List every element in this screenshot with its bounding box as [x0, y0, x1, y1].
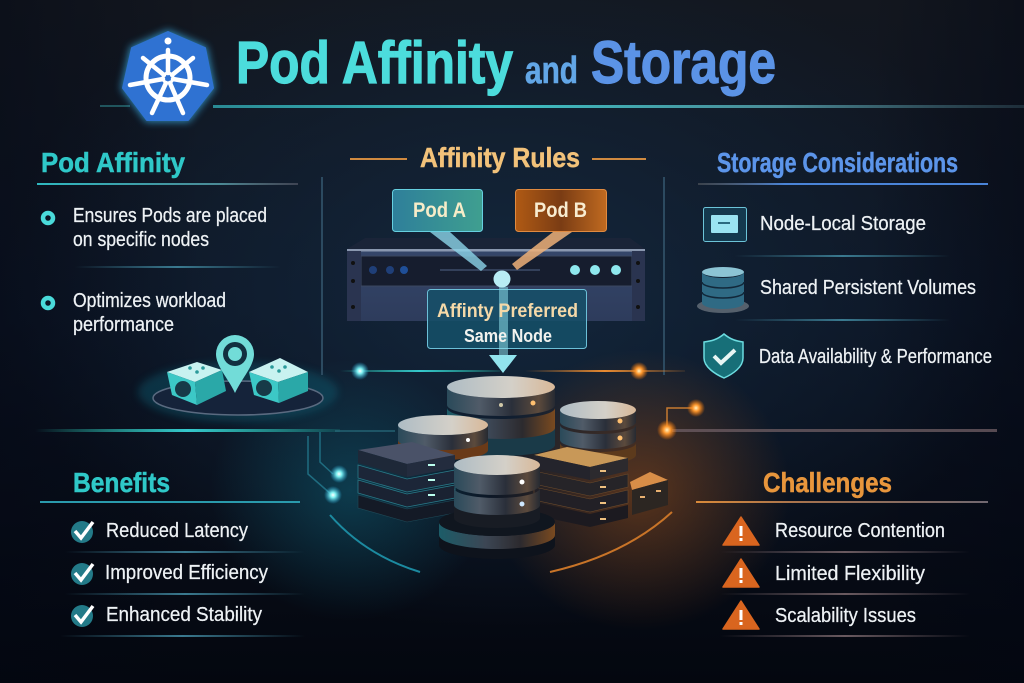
icon: nodes with location pin: [138, 335, 338, 422]
right storage cylinder: [560, 401, 636, 464]
front storage cylinder on base: [439, 455, 555, 559]
icon: kubernetes helm: [123, 32, 213, 120]
large storage cylinder: [447, 376, 555, 456]
panel: pod affinity: [37, 147, 338, 422]
pod b box: Pod B: [534, 199, 587, 222]
benefit: reduced latency: Reduced Latency: [106, 520, 248, 542]
challenge: limited flexibility: Limited Flexibility: [775, 563, 925, 585]
panel: challenges: [696, 467, 988, 637]
affinity preferred callout: Same Node: [464, 326, 552, 346]
bullet: performance: [43, 290, 226, 336]
heading: storage considerations: Storage Considerations: [717, 147, 958, 178]
pod a box: Pod A: [413, 199, 466, 222]
storage hardware cluster: [358, 376, 668, 559]
title header: and: [525, 50, 578, 92]
arrow: pod b to node: [512, 232, 572, 270]
heading: benefits: Benefits: [73, 467, 170, 498]
panel: affinity rules: [347, 142, 646, 373]
right small server stack: [630, 472, 668, 515]
heading: challenges: Challenges: [763, 467, 892, 498]
arrow: down to storage: [489, 355, 517, 373]
icon: node-local storage: [704, 208, 746, 242]
bullet: placement: [43, 205, 267, 251]
heading: pod affinity: Pod Affinity: [41, 147, 185, 178]
affinity preferred callout: [428, 287, 586, 355]
benefit: enhanced stability: Enhanced Stability: [106, 604, 262, 626]
title text: Pod Affinity: [236, 30, 513, 96]
challenge: resource contention: [723, 517, 945, 545]
server node: [347, 238, 645, 321]
pod a box: [392, 190, 482, 232]
benefit: improved efficiency: Improved Efficiency: [105, 562, 268, 584]
pod b box: [516, 190, 606, 232]
icon: shared volumes: [697, 267, 749, 313]
title header: [100, 29, 1024, 120]
challenge: limited flexibility: [723, 559, 925, 587]
left server stack: [358, 442, 455, 522]
title header: Storage: [591, 29, 776, 96]
bullet: performance: Optimizes workload: [73, 290, 226, 312]
challenge: scalability issues: Scalability Issues: [775, 605, 916, 627]
bullet: placement: Ensures Pods are placed: [73, 205, 267, 227]
item: node-local storage: Node-Local Storage: [760, 213, 926, 235]
right server stack: [534, 447, 628, 527]
panel: storage considerations: [697, 147, 992, 378]
affinity preferred callout: Affinty Preferred: [437, 301, 578, 322]
item: shared persistent volumes: Shared Persistent Volumes: [760, 277, 976, 299]
icon: shield check: [704, 334, 743, 378]
bullet: performance: performance: [73, 314, 174, 336]
heading: affinity rules: Affinity Rules: [420, 142, 580, 173]
divider lines and network traces: [35, 177, 997, 572]
bullet: placement: on specific nodes: [73, 229, 209, 251]
challenge: resource contention: Resource Contention: [775, 520, 945, 542]
challenge: scalability issues: [723, 601, 916, 629]
panel: benefits: [40, 467, 305, 637]
arrow: pod a to node: [430, 232, 487, 271]
left storage cylinder: [398, 415, 488, 460]
